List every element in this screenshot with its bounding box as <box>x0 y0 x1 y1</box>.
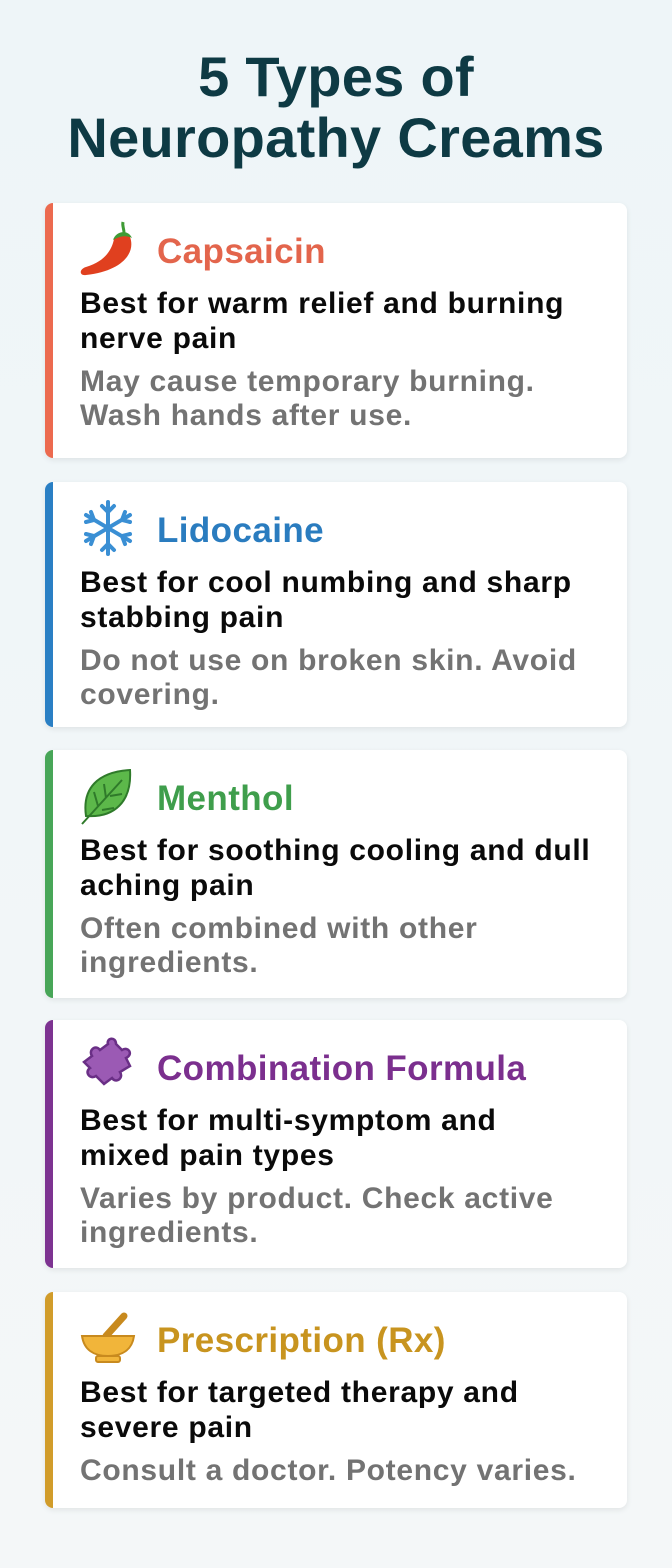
panel: combination formula <box>45 1020 627 1268</box>
icon: mortar and pestle <box>80 1312 136 1363</box>
heading: Combination Formula <box>157 1049 526 1088</box>
icon: snowflake <box>84 500 132 556</box>
text block <box>80 1104 554 1249</box>
panel: prescription <box>45 1292 627 1508</box>
text block: Do not use on broken skin. Avoid <box>80 644 577 677</box>
text block <box>80 1376 577 1487</box>
title: Neuropathy Creams <box>67 106 605 169</box>
icon: puzzle piece <box>82 1038 132 1086</box>
icon: leaf <box>81 769 132 825</box>
text block: severe pain <box>80 1411 253 1444</box>
text block <box>80 287 564 432</box>
text block: Best for warm relief and burning <box>80 287 564 320</box>
panel: lidocaine <box>45 482 627 727</box>
text block <box>80 834 590 979</box>
text block: ingredients. <box>80 1216 258 1249</box>
heading: Capsaicin <box>157 232 326 271</box>
text block: Best for soothing cooling and dull <box>80 834 590 867</box>
text block: May cause temporary burning. <box>80 365 535 398</box>
text block: ingredients. <box>80 946 258 979</box>
panel: capsaicin <box>45 203 627 458</box>
text block: stabbing pain <box>80 601 284 634</box>
icon: chili pepper <box>80 222 132 276</box>
text block: Best for targeted therapy and <box>80 1376 519 1409</box>
text block: Best for multi-symptom and <box>80 1104 497 1137</box>
text block: mixed pain types <box>80 1139 335 1172</box>
title: 5 Types of <box>198 45 474 108</box>
text block <box>80 566 577 711</box>
text block: Best for cool numbing and sharp <box>80 566 572 599</box>
text block: covering. <box>80 678 220 711</box>
text block: Often combined with other <box>80 912 478 945</box>
text block: nerve pain <box>80 322 237 355</box>
heading: Lidocaine <box>157 511 324 550</box>
text block: Varies by product. Check active <box>80 1182 554 1215</box>
text block: Wash hands after use. <box>80 399 412 432</box>
heading: Menthol <box>157 779 294 818</box>
text block: aching pain <box>80 869 254 902</box>
text block: Consult a doctor. Potency varies. <box>80 1454 577 1487</box>
panel: menthol <box>45 750 627 998</box>
heading: Prescription (Rx) <box>157 1321 446 1360</box>
title <box>67 45 605 169</box>
